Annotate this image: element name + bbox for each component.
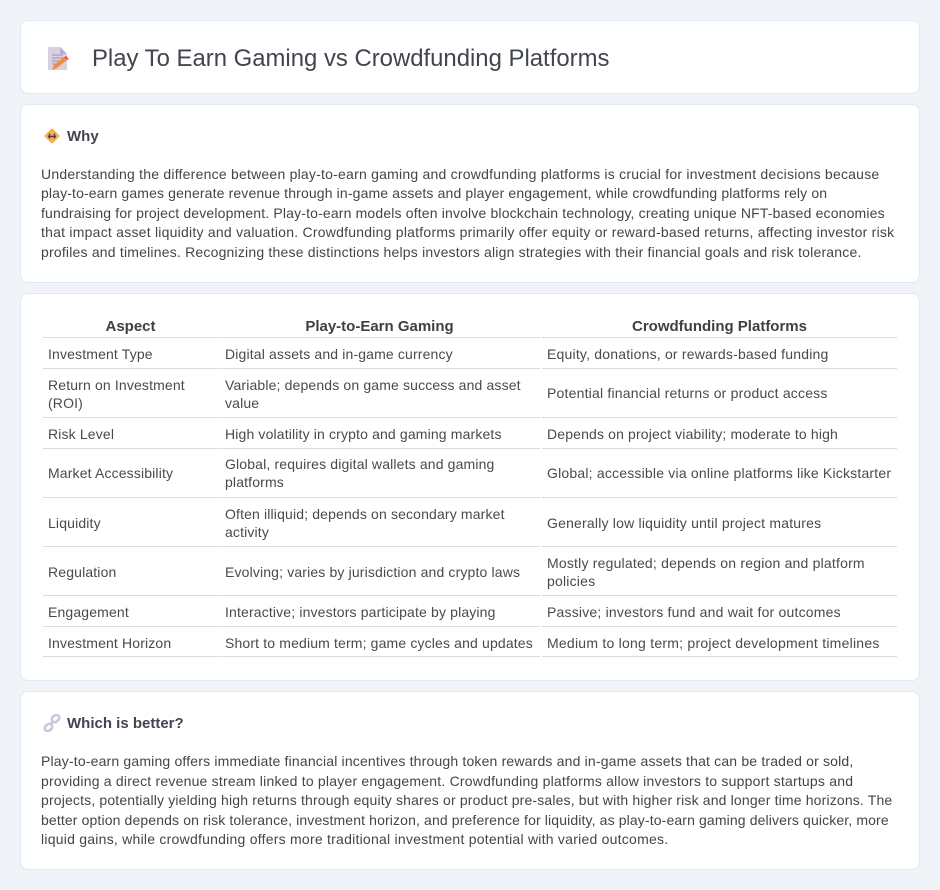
row: market accessibility: platforms xyxy=(225,474,284,490)
row: ROI: (ROI) xyxy=(48,395,83,411)
text block: which is better: better option depends on risk tolerance, investment horizon, and preference for liquidity, as play-to-earn gaming delivers quicker, more xyxy=(41,812,889,828)
row: regulation: Regulation xyxy=(48,564,116,580)
row: liquidity: Often illiquid; depends on secondary market xyxy=(225,506,505,522)
table header: Play-to-Earn Gaming xyxy=(305,318,454,335)
row: regulation: policies xyxy=(547,573,595,589)
row: regulation xyxy=(48,555,865,589)
row: liquidity xyxy=(48,506,821,540)
row: risk level xyxy=(48,426,838,442)
row: investment type: Investment Type xyxy=(48,346,153,362)
table header xyxy=(105,318,807,335)
row: market accessibility: Global, requires digital wallets and gaming xyxy=(225,456,494,472)
row: regulation: Mostly regulated; depends on region and platform xyxy=(547,555,865,571)
row: investment type: Equity, donations, or rewards-based funding xyxy=(547,346,829,362)
panel: why xyxy=(20,104,920,283)
text block: why: play-to-earn games generate revenue through in-game assets and player engagement, while crowdfunding platforms rely on xyxy=(41,185,827,201)
row: risk level: Risk Level xyxy=(48,426,114,442)
table header: Aspect xyxy=(105,318,156,335)
row: liquidity: Generally low liquidity until project matures xyxy=(547,515,821,531)
row: investment type xyxy=(48,346,829,362)
row: ROI: value xyxy=(225,395,259,411)
heading: which is better: Which is better? xyxy=(67,714,184,732)
row: investment horizon: Short to medium term; game cycles and updates xyxy=(225,635,533,651)
text block: why xyxy=(41,166,894,260)
row: regulation: Evolving; varies by jurisdiction and crypto laws xyxy=(225,564,520,580)
text block: which is better: Play-to-earn gaming offers immediate financial incentives through token rewards and in-game assets that can be traded or sold, xyxy=(41,753,853,769)
text block: why: Understanding the difference between play-to-earn gaming and crowdfunding platforms is crucial for investment decisions because xyxy=(41,166,879,182)
text block: why: fundraising for project development. Play-to-earn models often involve blockchain technology, creating unique NFT-based economies xyxy=(41,205,885,221)
icon: warning diamond xyxy=(44,128,60,144)
text block: why: that impact asset liquidity and valuation. Crowdfunding platforms primarily offer equity or reward-based returns, affecting investor risk xyxy=(41,224,894,240)
row: market accessibility xyxy=(48,456,891,490)
row: engagement: Engagement xyxy=(48,604,129,620)
row: ROI: Return on Investment xyxy=(48,377,185,393)
text block: which is better: providing a direct revenue stream linked to player engagement. Crowdfunding platforms allow investors to support startups and xyxy=(41,773,853,789)
row: engagement: Passive; investors fund and wait for outcomes xyxy=(547,604,841,620)
row: ROI xyxy=(48,377,828,411)
row: market accessibility: Market Accessibility xyxy=(48,465,173,481)
row: risk level: High volatility in crypto and gaming markets xyxy=(225,426,502,442)
row: engagement: Interactive; investors participate by playing xyxy=(225,604,496,620)
text block: which is better: projects, potentially yielding high returns through equity shares or product pre-sales, but with higher risk and longer time horizons. The xyxy=(41,792,892,808)
heading: why: Why xyxy=(67,128,99,144)
title: Play To Earn Gaming vs Crowdfunding Platforms xyxy=(92,45,609,72)
row: ROI: Potential financial returns or product access xyxy=(547,385,828,401)
text block: which is better xyxy=(41,753,892,847)
row: engagement xyxy=(48,604,841,620)
row: market accessibility: Global; accessible via online platforms like Kickstarter xyxy=(547,465,891,481)
row: investment horizon xyxy=(48,635,880,651)
row: liquidity: activity xyxy=(225,524,269,540)
row: investment type: Digital assets and in-game currency xyxy=(225,346,453,362)
table header: Crowdfunding Platforms xyxy=(632,318,807,335)
text block: which is better: liquid gains, while crowdfunding offers more traditional investment potential with varied outcomes. xyxy=(41,831,668,847)
row: liquidity: Liquidity xyxy=(48,515,101,531)
text block: why: profiles and timelines. Recognizing these distinctions helps investors align strategies with their financial goals and risk tolerance. xyxy=(41,244,862,260)
row: investment horizon: Medium to long term; project development timelines xyxy=(547,635,880,651)
row: risk level: Depends on project viability; moderate to high xyxy=(547,426,838,442)
icon: link xyxy=(44,714,60,732)
panel: title card xyxy=(20,20,920,94)
icon: document with pencil xyxy=(48,47,69,70)
row: investment horizon: Investment Horizon xyxy=(48,635,171,651)
panel: comparison table xyxy=(20,293,920,681)
panel: which is better xyxy=(20,691,920,870)
row: ROI: Variable; depends on game success and asset xyxy=(225,377,521,393)
